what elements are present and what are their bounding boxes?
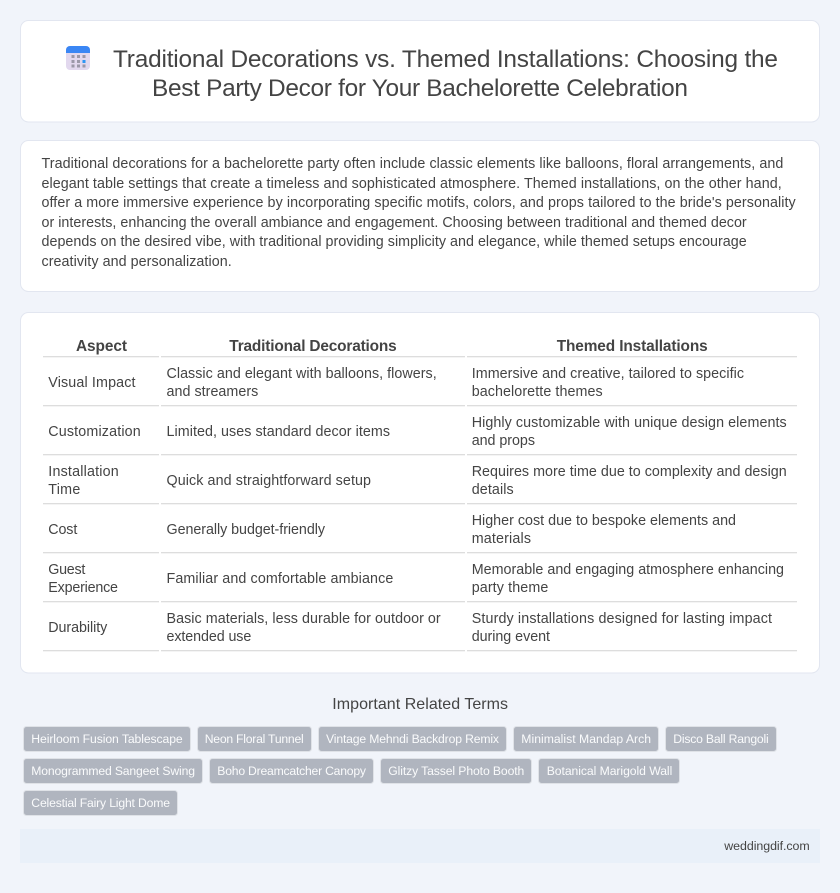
tag: Celestial Fairy Light Dome	[31, 796, 170, 810]
footer bar: weddingdif.com	[723, 839, 810, 853]
title: Traditional Decorations vs. Themed Installations: Choosing the	[113, 46, 778, 73]
table row: installation time: Requires more time due to complexity and design	[472, 464, 787, 480]
title	[113, 46, 778, 102]
tag: Minimalist Mandap Arch	[521, 732, 651, 746]
table row: customization: Limited, uses standard decor items	[166, 424, 390, 440]
related term tags	[24, 726, 776, 816]
tag: Monogrammed Sangeet Swing	[31, 764, 195, 778]
table row: guest experience	[43, 562, 797, 602]
heading: important related terms: Important Related Terms	[332, 696, 508, 713]
tag	[514, 726, 658, 752]
table row: customization: Customization	[48, 424, 141, 440]
table row: cost: Generally budget-friendly	[166, 522, 326, 538]
tag	[24, 726, 190, 752]
title: Best Party Decor for Your Bachelorette Celebration	[152, 75, 688, 102]
table row: cost: Cost	[48, 522, 77, 538]
table row: durability: extended use	[166, 629, 251, 645]
tag	[318, 726, 506, 752]
tag	[666, 726, 776, 752]
intro paragraph: creativity and personalization.	[42, 254, 232, 270]
table row: cost	[43, 513, 797, 553]
tag: Heirloom Fusion Tablescape	[31, 732, 183, 746]
tag	[538, 758, 680, 784]
table row: visual impact: bachelorette themes	[472, 384, 603, 400]
panel: title card	[20, 20, 820, 122]
intro paragraph	[42, 156, 797, 270]
intro paragraph: or interests, enhancing the overall ambiance and engagement. Choosing between traditional and themed decor	[42, 215, 747, 231]
intro paragraph: depends on the desired vibe, with traditional providing simplicity and elegance, while themed setups encourage	[42, 234, 747, 250]
tag: Botanical Marigold Wall	[547, 764, 672, 778]
table row: guest experience: Experience	[48, 580, 118, 596]
table row: visual impact: Visual Impact	[48, 375, 136, 391]
table row: visual impact: and streamers	[166, 384, 258, 400]
table row: visual impact: Classic and elegant with balloons, flowers,	[166, 366, 437, 382]
table row: customization	[43, 415, 797, 455]
table row: customization: and props	[472, 433, 535, 449]
tag	[380, 758, 532, 784]
table row: customization: Highly customizable with unique design elements	[472, 415, 787, 431]
tag: Disco Ball Rangoli	[673, 732, 769, 746]
table row: guest experience: party theme	[472, 580, 548, 596]
table row: durability: during event	[472, 629, 550, 645]
table row: cost: Higher cost due to bespoke elements and	[472, 513, 736, 529]
panel: intro text card	[20, 140, 820, 292]
table row: installation time: details	[472, 482, 514, 498]
tag: Neon Floral Tunnel	[205, 732, 304, 746]
footer bar	[20, 829, 820, 863]
tag: Boho Dreamcatcher Canopy	[217, 764, 367, 778]
table row: visual impact	[43, 366, 797, 406]
tag: Glitzy Tassel Photo Booth	[388, 764, 524, 778]
table row: durability	[43, 611, 797, 651]
tag	[210, 758, 374, 784]
table row: durability: Sturdy installations designed for lasting impact	[472, 611, 772, 627]
table header row	[43, 338, 797, 357]
icon: calendar	[66, 46, 90, 70]
tag	[24, 790, 178, 816]
table row: guest experience: Memorable and engaging atmosphere enhancing	[472, 562, 784, 578]
tag: Vintage Mehndi Backdrop Remix	[326, 732, 499, 746]
table row: durability: Durability	[48, 620, 108, 636]
tag	[24, 758, 202, 784]
intro paragraph: offer a more immersive experience by incorporating specific motifs, colors, and props tailored to the bride's personality	[42, 195, 797, 211]
table row: installation time	[43, 464, 797, 504]
table header row: Aspect	[76, 338, 127, 355]
panel: comparison table card	[20, 312, 820, 673]
intro paragraph: elegant table settings that create a timeless and sophisticated atmosphere. Themed installations, on the other hand,	[42, 176, 782, 192]
table row: guest experience: Familiar and comfortable ambiance	[166, 571, 393, 587]
table row: visual impact: Immersive and creative, tailored to specific	[472, 366, 744, 382]
table row: guest experience: Guest	[48, 562, 85, 578]
table row: installation time: Quick and straightforward setup	[166, 473, 371, 489]
table row: installation time: Time	[48, 482, 80, 498]
table row: cost: materials	[472, 531, 531, 547]
tag	[198, 726, 312, 752]
table row: installation time: Installation	[48, 464, 119, 480]
table row: durability: Basic materials, less durable for outdoor or	[166, 611, 441, 627]
table header row: Themed Installations	[557, 338, 708, 355]
table header row: Traditional Decorations	[229, 338, 397, 355]
intro paragraph: Traditional decorations for a bachelorette party often include classic elements like balloons, floral arrangements, and	[42, 156, 783, 172]
